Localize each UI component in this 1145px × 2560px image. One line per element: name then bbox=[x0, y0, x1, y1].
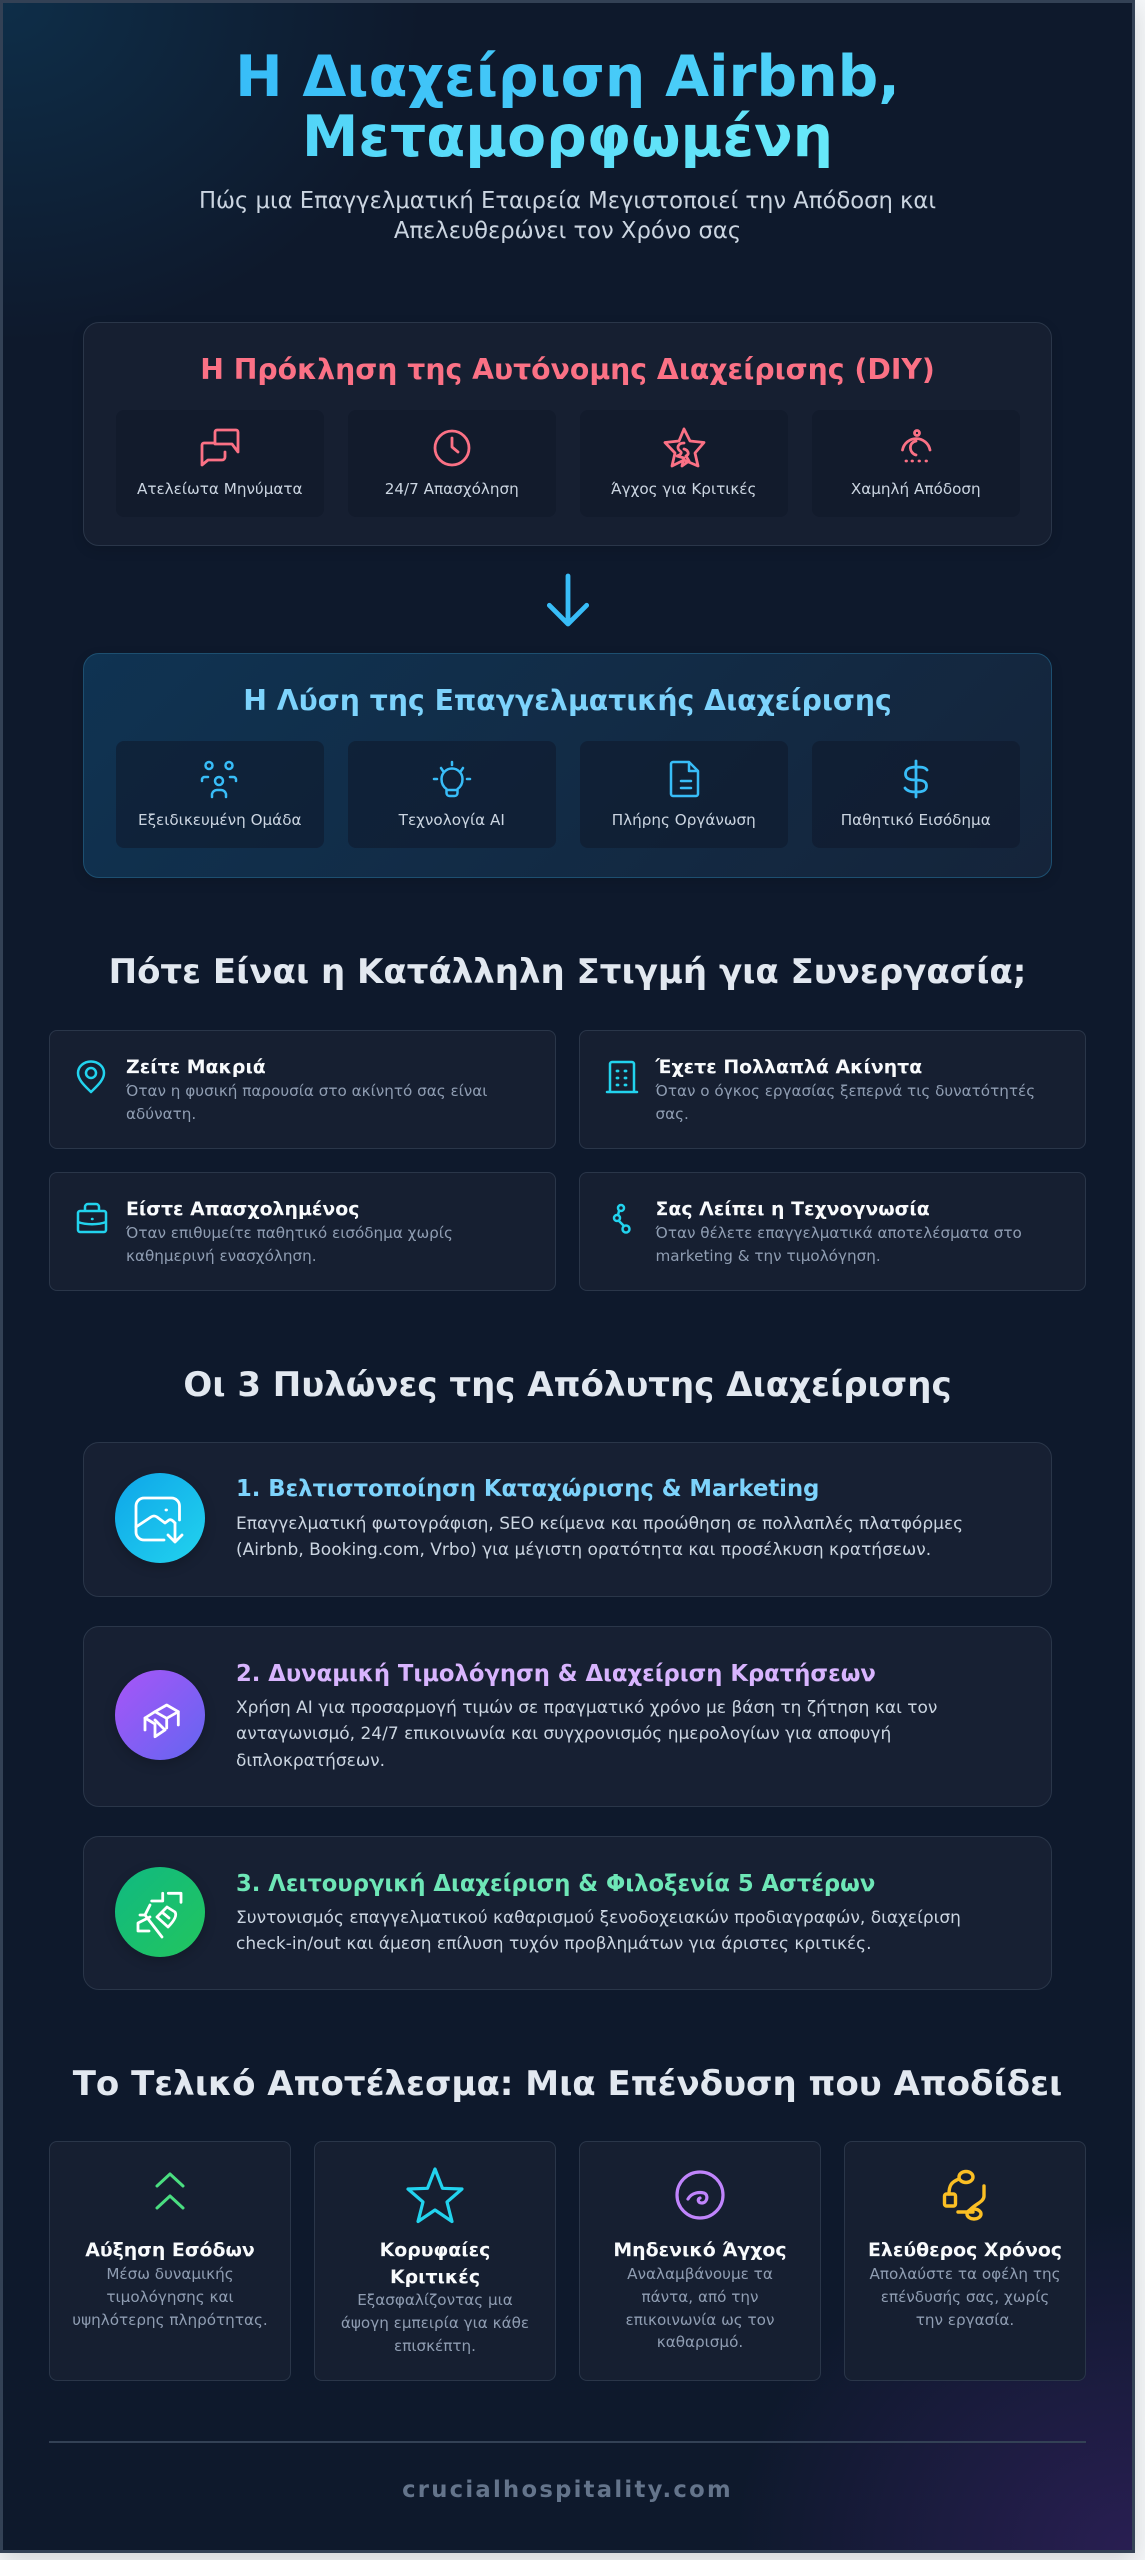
card text bbox=[126, 1082, 487, 1123]
card text: Όταν η φυσική παρουσία στο ακίνητό σας είναι bbox=[126, 1082, 487, 1100]
icon: listing image bbox=[114, 1473, 204, 1563]
subtitle: Απελευθερώνει τον Χρόνο σας bbox=[394, 218, 741, 244]
card text: καθημερινή ενασχόληση. bbox=[126, 1247, 317, 1265]
card text: σας. bbox=[656, 1105, 689, 1123]
result title: Μηδενικό Άγχος bbox=[613, 2239, 787, 2261]
card text: Όταν ο όγκος εργασίας ξεπερνά τις δυνατότητές bbox=[656, 1082, 1035, 1100]
title bbox=[235, 44, 900, 170]
icon: broken star bbox=[664, 428, 706, 468]
icon: cleaning tools bbox=[114, 1867, 204, 1957]
label: Εξειδικευμένη Ομάδα bbox=[138, 811, 302, 829]
icon: map pin bbox=[76, 1060, 106, 1094]
card text bbox=[126, 1224, 453, 1265]
pillar text bbox=[236, 1908, 961, 1954]
result text bbox=[626, 2265, 774, 2351]
pillar text bbox=[236, 1698, 937, 1771]
result text bbox=[341, 2291, 529, 2355]
label: Πλήρης Οργάνωση bbox=[612, 811, 756, 829]
result text: Μέσω δυναμικής bbox=[106, 2265, 234, 2283]
icon: route nodes bbox=[942, 2170, 986, 2221]
footer: website: crucialhospitality.com bbox=[402, 2477, 733, 2503]
label: Άγχος για Κριτικές bbox=[611, 480, 756, 498]
arrow: challenge to solution bbox=[546, 574, 590, 626]
icon: dynamic pricing blocks bbox=[114, 1670, 204, 1760]
label: 24/7 Απασχόληση bbox=[385, 480, 519, 498]
icon: calm circle bbox=[675, 2170, 725, 2220]
icon: light bulb bbox=[432, 760, 472, 798]
result: free time bbox=[844, 2141, 1086, 2381]
card title: Σας Λείπει η Τεχνογνωσία bbox=[656, 1198, 930, 1220]
result text: τιμολόγησης και bbox=[106, 2288, 234, 2306]
result title: Κριτικές bbox=[390, 2266, 480, 2288]
pillar 2 bbox=[83, 1626, 1052, 1807]
pillar 3 bbox=[83, 1836, 1052, 1990]
item: review anxiety bbox=[580, 410, 788, 517]
result text: επένδυσής σας, χωρίς bbox=[881, 2288, 1049, 2306]
card text: αδύνατη. bbox=[126, 1105, 196, 1123]
result text: την εργασία. bbox=[916, 2311, 1014, 2329]
result text: υψηλότερης πληρότητας. bbox=[72, 2311, 268, 2329]
icon: bell gauge bbox=[901, 429, 932, 462]
card: live far away bbox=[49, 1030, 556, 1149]
subtitle: Πώς μια Επαγγελματική Εταιρεία Μεγιστοποιεί την Απόδοση και bbox=[199, 188, 936, 214]
result text: επισκέπτη. bbox=[394, 2337, 476, 2355]
icon: connected nodes bbox=[612, 1204, 631, 1234]
result text bbox=[869, 2265, 1061, 2329]
pillar text: ανταγωνισμό, 24/7 επικοινωνία και συγχρονισμός ημερολογίων για αποφυγή bbox=[236, 1724, 891, 1744]
card text: Όταν θέλετε επαγγελματικά αποτελέσματα στο bbox=[656, 1224, 1022, 1242]
pillar title: 2. Δυναμική Τιμολόγηση & Διαχείριση Κρατήσεων bbox=[236, 1661, 876, 1687]
pillar title: 1. Βελτιστοποίηση Καταχώρισης & Marketing bbox=[236, 1476, 819, 1502]
result text: επικοινωνία ως τον bbox=[626, 2311, 774, 2329]
item: endless messages bbox=[116, 410, 324, 517]
icon: chat bubbles bbox=[200, 428, 240, 466]
icon: building bbox=[606, 1060, 638, 1094]
card text: Όταν επιθυμείτε παθητικό εισόδημα χωρίς bbox=[126, 1224, 453, 1242]
result text: καθαρισμό. bbox=[657, 2333, 743, 2351]
label: Ατελείωτα Μηνύματα bbox=[137, 480, 303, 498]
result title: Αύξηση Εσόδων bbox=[85, 2239, 255, 2261]
label: Παθητικό Εισόδημα bbox=[841, 811, 991, 829]
result text bbox=[72, 2265, 268, 2329]
panel heading: DIY challenge: Η Πρόκληση της Αυτόνομης Διαχείρισης (DIY) bbox=[200, 353, 935, 386]
pillar text: Επαγγελματική φωτογράφιση, SEO κείμενα και προώθηση σε πολλαπλές πλατφόρμες bbox=[236, 1514, 963, 1534]
icon: clock bbox=[434, 430, 470, 466]
label: Τεχνολογία AI bbox=[399, 811, 505, 829]
result title: Κορυφαίες bbox=[380, 2239, 490, 2261]
card text: marketing & την τιμολόγηση. bbox=[656, 1247, 881, 1265]
card text bbox=[656, 1224, 1022, 1265]
heading: three pillars: Οι 3 Πυλώνες της Απόλυτης Διαχείρισης bbox=[183, 1365, 952, 1405]
card text bbox=[656, 1082, 1035, 1123]
pillar text: (Airbnb, Booking.com, Vrbo) για μέγιστη ορατότητα και προσέλκυση κρατήσεων. bbox=[236, 1540, 931, 1560]
result: revenue increase bbox=[49, 2141, 291, 2381]
title: Μεταμορφωμένη bbox=[302, 104, 833, 170]
result title bbox=[380, 2239, 490, 2288]
pillar text: Χρήση AI για προσαρμογή τιμών σε πραγματικό χρόνο με βάση τη ζήτηση και τον bbox=[236, 1698, 937, 1718]
card title: Έχετε Πολλαπλά Ακίνητα bbox=[656, 1056, 922, 1078]
subtitle bbox=[199, 188, 936, 244]
result: zero stress bbox=[579, 2141, 821, 2381]
result: top reviews bbox=[314, 2141, 556, 2381]
result text: Εξασφαλίζοντας μια bbox=[357, 2291, 513, 2309]
card: multiple properties bbox=[578, 1030, 1086, 1149]
icon: document bbox=[670, 760, 700, 798]
item: AI technology bbox=[348, 741, 556, 848]
icon: dollar bbox=[904, 760, 928, 798]
pillar title: 3. Λειτουργική Διαχείριση & Φιλοξενία 5 Αστέρων bbox=[236, 1871, 875, 1897]
label: Χαμηλή Απόδοση bbox=[851, 480, 981, 498]
result text: Αναλαμβάνουμε τα bbox=[627, 2265, 773, 2283]
item: 24/7 occupation bbox=[348, 410, 556, 517]
pillar text: check-in/out και άμεση επίλυση τυχόν προβλημάτων για άριστες κριτικές. bbox=[236, 1934, 872, 1954]
pillar text bbox=[236, 1514, 963, 1560]
icon: briefcase bbox=[76, 1202, 108, 1234]
panel heading: solution: Η Λύση της Επαγγελματικής Διαχείρισης bbox=[243, 684, 892, 717]
heading: final result: Το Τελικό Αποτέλεσμα: Μια Επένδυση που Αποδίδει bbox=[73, 2064, 1062, 2104]
result text: Απολαύστε τα οφέλη της bbox=[869, 2265, 1061, 2283]
pillar text: Συντονισμός επαγγελματικού καθαρισμού ξενοδοχειακών προδιαγραφών, διαχείριση bbox=[236, 1908, 961, 1928]
result text: πάντα, από την bbox=[642, 2288, 758, 2306]
icon: team bbox=[200, 760, 238, 798]
card: lack of know-how bbox=[578, 1172, 1086, 1291]
icon: star bbox=[406, 2167, 464, 2224]
card: busy bbox=[49, 1172, 556, 1291]
card title: Ζείτε Μακριά bbox=[126, 1056, 266, 1078]
item: passive income bbox=[812, 741, 1020, 848]
icon: double chevron up bbox=[155, 2172, 185, 2210]
item: low yield bbox=[812, 410, 1020, 517]
title: Η Διαχείριση Airbnb, bbox=[235, 44, 900, 110]
result title: Ελεύθερος Χρόνος bbox=[868, 2239, 1062, 2261]
result text: άψογη εμπειρία για κάθε bbox=[341, 2314, 529, 2332]
pillar text: διπλοκρατήσεων. bbox=[236, 1751, 385, 1771]
panel: DIY challenge bbox=[83, 322, 1052, 546]
heading: when to partner: Πότε Είναι η Κατάλληλη Στιγμή για Συνεργασία; bbox=[109, 952, 1026, 992]
item: full organisation bbox=[580, 741, 788, 848]
pillar 1 bbox=[83, 1442, 1052, 1597]
card title: Είστε Απασχολημένος bbox=[126, 1198, 359, 1220]
item: specialised team bbox=[116, 741, 324, 848]
panel: professional solution bbox=[83, 653, 1052, 878]
